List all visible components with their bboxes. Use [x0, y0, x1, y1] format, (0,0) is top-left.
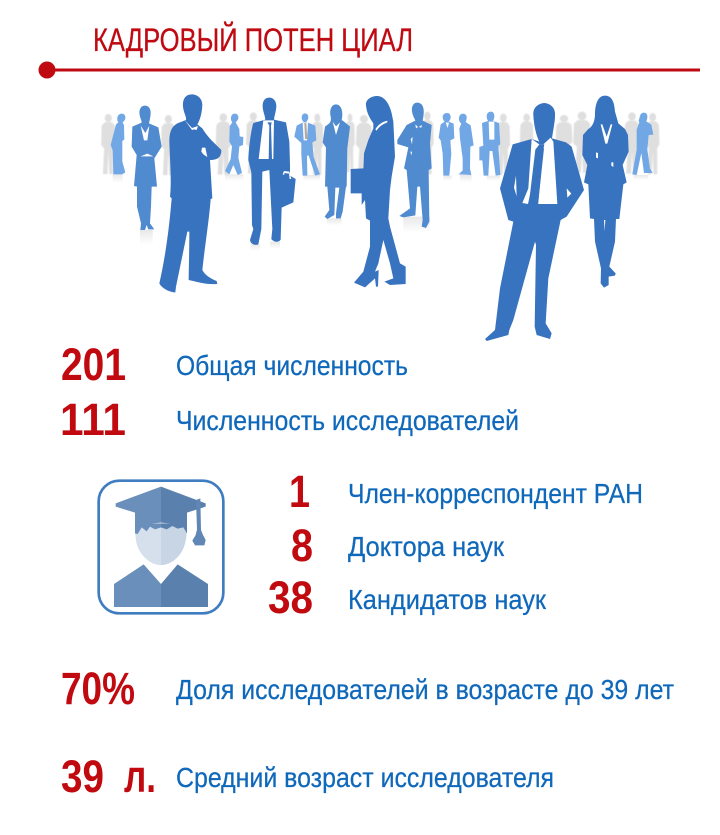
stat: doctors of science: Доктора наук — [348, 531, 505, 562]
title rule with dot — [38, 62, 700, 78]
mid blue figures — [132, 103, 432, 230]
stat: researchers: Численность исследователей — [176, 405, 519, 436]
stat: average age — [61, 751, 554, 802]
stat: candidates of science: 38 — [268, 572, 313, 623]
light blue small figures — [111, 112, 653, 176]
background grey figures — [101, 112, 659, 175]
stat: researchers: 111 — [60, 394, 126, 445]
light blue figure shirt details — [303, 122, 494, 140]
stat: total staff: Общая численность — [176, 350, 408, 381]
stat: average age: л. — [124, 751, 156, 802]
floor shadows — [113, 174, 648, 251]
foreground man with crossed arms — [159, 94, 221, 292]
foreground man with briefcase — [248, 98, 296, 245]
stat: average age: Средний возраст исследователя — [176, 762, 554, 793]
stat: average age: 39 — [61, 751, 104, 802]
stat: doctors of science — [291, 520, 505, 571]
foreground walking woman with folder — [351, 96, 406, 287]
face — [135, 523, 187, 565]
title: КАДРОВЫЙ ПОТЕН ЦИАЛ — [93, 22, 413, 58]
icon: graduate in cap — [99, 481, 223, 613]
stat: corresponding member: Член-корреспондент РАН — [348, 478, 643, 509]
stat: researchers — [60, 394, 519, 445]
stat: corresponding member: 1 — [289, 466, 310, 517]
tassel — [192, 498, 206, 545]
gown — [114, 564, 208, 607]
stat: candidates of science — [268, 572, 547, 623]
stat: candidates of science: Кандидатов наук — [348, 584, 547, 615]
stat: doctors of science: 8 — [291, 520, 313, 571]
stat: total staff: 201 — [61, 339, 126, 390]
stat: corresponding member — [289, 466, 643, 517]
mortarboard — [116, 487, 206, 525]
stat: share under 39 — [61, 663, 674, 714]
illustration: crowd of business people silhouettes — [101, 94, 659, 341]
foreground woman with badge — [582, 96, 629, 288]
mid blue figure details — [141, 122, 422, 156]
stat: share under 39: 70% — [61, 663, 135, 714]
foreground man with hands in pockets — [485, 103, 584, 341]
stat: total staff — [61, 339, 408, 390]
